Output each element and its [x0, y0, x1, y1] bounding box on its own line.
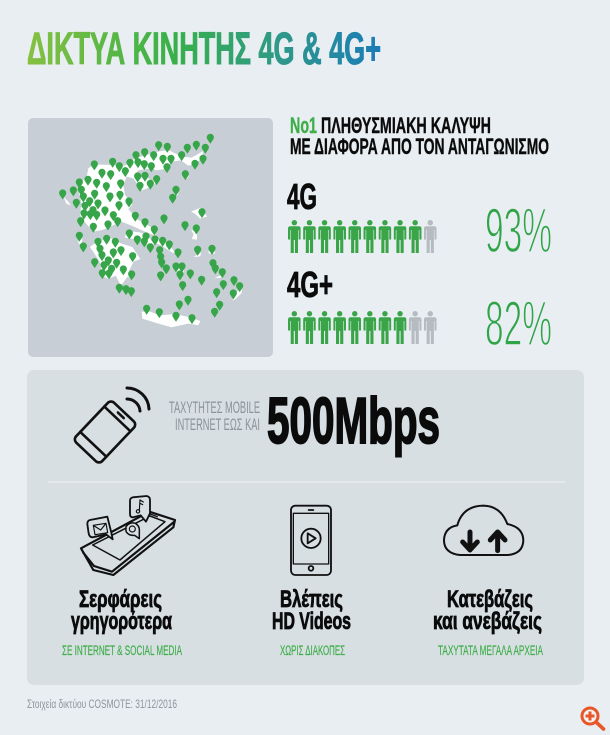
speed caption — [169, 398, 260, 434]
network pins — [59, 134, 243, 324]
coverage heading — [290, 113, 549, 159]
icon: cloud with arrows — [444, 506, 523, 555]
speed value: 500Mbps — [267, 384, 440, 457]
heading: HD videos: HD Videos — [272, 608, 351, 635]
heading: HD videos: Βλέπεις — [280, 586, 343, 613]
heading: download and upload: και ανεβάζεις — [433, 608, 542, 635]
82 percent: 82% — [485, 289, 552, 359]
title: ΔΙΚΤΥΑ ΚΙΝΗΤΗΣ 4G & 4G+ — [27, 23, 381, 74]
93 percent: 93% — [485, 196, 552, 266]
panel: speeds — [27, 370, 584, 685]
map of Greece — [59, 134, 243, 327]
heading: surf faster — [71, 586, 172, 635]
heading: download and upload — [433, 586, 542, 635]
caption: internet and social: ΣΕ INTERNET & SOCIAL MEDIA — [62, 643, 182, 658]
icon: phone with video — [291, 506, 331, 575]
heading: surf faster: Σερφάρεις — [79, 586, 162, 613]
coverage heading: Νο1 ΠΛΗΘΥΣΜΙΑΚΗ ΚΑΛΥΨΗ — [290, 113, 491, 138]
speed caption: INTERNET ΕΩΣ ΚΑΙ — [175, 415, 260, 434]
icon: phone with social bubbles — [81, 496, 175, 575]
people chart: 4G — [288, 220, 437, 253]
4G+ label: 4G+ — [287, 264, 333, 305]
4G label: 4G — [287, 176, 317, 217]
heading: HD videos — [272, 586, 351, 635]
source note: Στοιχεία δικτύου COSMOTE: 31/12/2016 — [27, 697, 177, 711]
icon: phone with signal — [73, 388, 149, 464]
caption: large files: ΤΑΧΥΤΑΤΑ ΜΕΓΑΛΑ ΑΡΧΕΙΑ — [438, 643, 543, 658]
icon: zoom magnifier — [582, 708, 604, 729]
heading: surf faster: γρηγορότερα — [71, 608, 172, 635]
caption: no interruptions: ΧΩΡΙΣ ΔΙΑΚΟΠΕΣ — [280, 643, 345, 658]
heading: download and upload: Κατεβάζεις — [447, 586, 533, 613]
panel: coverage map — [28, 118, 273, 357]
speed caption: ΤΑΧΥΤΗΤΕΣ MOBILE — [169, 398, 260, 417]
people chart: 4G+ — [288, 311, 437, 344]
